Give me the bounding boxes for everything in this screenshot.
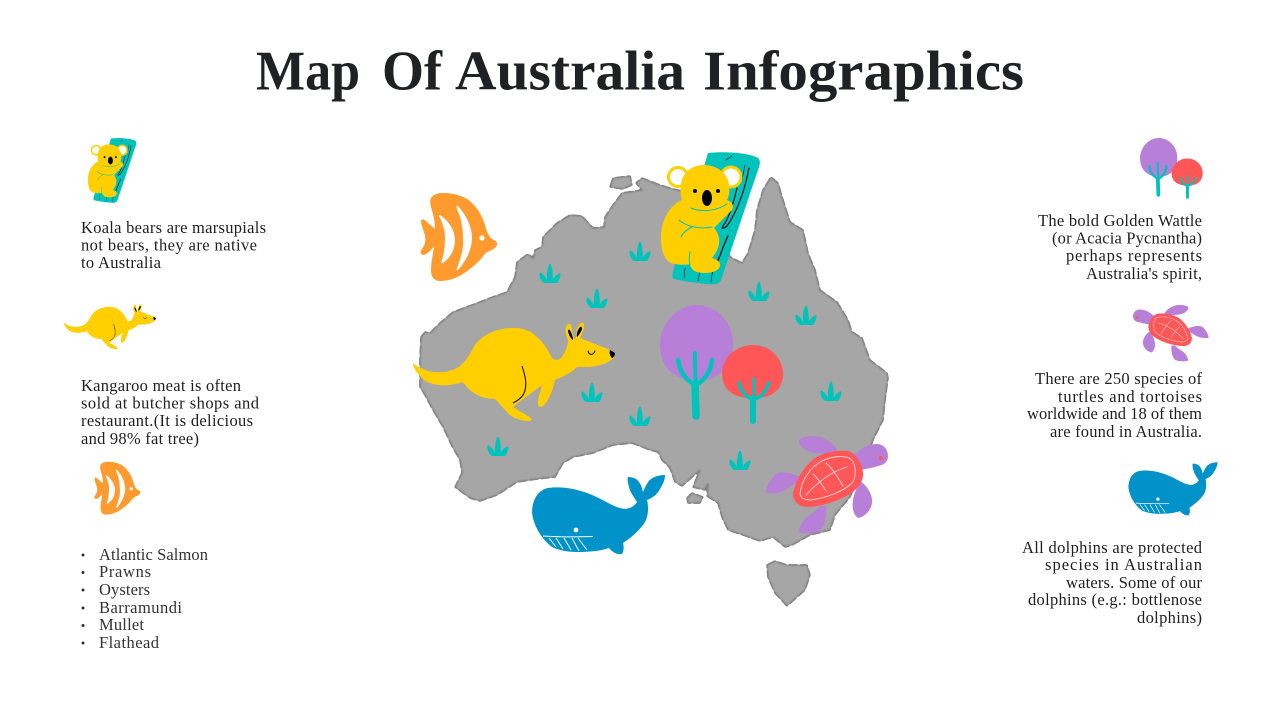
icon: whale <box>1128 462 1218 515</box>
title: Map <box>256 40 360 102</box>
panel: turtle fact <box>1027 305 1209 441</box>
text: dolphin fact: species in Australian <box>1045 555 1202 574</box>
text: koala fact: not bears, they are native <box>81 236 257 254</box>
panel: map of Australia <box>413 152 888 606</box>
panel: golden wattle fact <box>1038 138 1203 283</box>
panel: fish list <box>82 462 208 652</box>
text: golden wattle fact: Australia's spirit, <box>1086 264 1202 283</box>
panel: dolphin fact <box>1022 462 1218 627</box>
text: dolphin fact: All dolphins are protected <box>1022 538 1203 557</box>
map icon: purple and red trees <box>660 305 783 421</box>
bullet list: fish species: Barramundi <box>99 598 182 617</box>
map icon: orange fish <box>421 193 497 281</box>
text: turtle fact: turtles and tortoises <box>1058 387 1202 406</box>
bullet list: fish species: Mullet <box>99 615 144 634</box>
bullet list: fish species <box>82 545 208 652</box>
map icon: whale <box>532 475 665 554</box>
icon: trees <box>1140 138 1203 197</box>
text: golden wattle fact <box>1038 211 1202 283</box>
text: turtle fact <box>1027 369 1202 441</box>
text: koala fact <box>81 218 266 272</box>
icon: turtle <box>1133 305 1209 361</box>
icon: fish <box>94 462 140 515</box>
map icon: sea turtle <box>766 436 888 533</box>
text: dolphin fact: dolphins) <box>1137 608 1202 627</box>
panel: koala fact <box>81 138 266 272</box>
panel: kangaroo fact <box>64 304 260 448</box>
map icon: koala on tree trunk <box>661 152 760 284</box>
text: kangaroo fact: and 98% fat tree) <box>81 429 199 448</box>
text: dolphin fact: waters. Some of our <box>1066 573 1202 592</box>
title: Infographics <box>703 40 1024 102</box>
text: golden wattle fact: (or Acacia Pycnantha) <box>1052 228 1202 248</box>
text: golden wattle fact: perhaps represents <box>1066 246 1202 265</box>
title: Australia <box>455 40 685 102</box>
title <box>256 40 1024 102</box>
text: dolphin fact: dolphins (e.g.: bottlenose <box>1028 590 1202 609</box>
title: Of <box>382 40 443 102</box>
map: landmass outlines <box>420 176 888 606</box>
text: kangaroo fact <box>81 376 260 448</box>
text: golden wattle fact: The bold Golden Wattle <box>1038 211 1202 230</box>
bullet list: fish species: Prawns <box>99 562 151 581</box>
text: koala fact: Koala bears are marsupials <box>81 218 266 237</box>
text: turtle fact: There are 250 species of <box>1035 369 1202 388</box>
icon: kangaroo <box>64 304 156 349</box>
text: kangaroo fact: sold at butcher shops and <box>81 394 260 412</box>
text: dolphin fact <box>1022 538 1203 627</box>
icon: koala <box>88 138 136 203</box>
text: turtle fact: are found in Australia. <box>1050 422 1202 441</box>
text: kangaroo fact: Kangaroo meat is often <box>81 376 241 395</box>
bullet list: fish species: Atlantic Salmon <box>99 545 208 564</box>
bullet list: fish species: Oysters <box>99 580 150 599</box>
text: kangaroo fact: restaurant.(It is delicious <box>81 411 253 430</box>
text: turtle fact: worldwide and 18 of them <box>1027 404 1202 423</box>
grass tufts on the map <box>487 242 842 470</box>
bullet list: fish species: Flathead <box>99 633 160 652</box>
map icon: kangaroo <box>413 323 615 421</box>
text: koala fact: to Australia <box>81 253 162 272</box>
